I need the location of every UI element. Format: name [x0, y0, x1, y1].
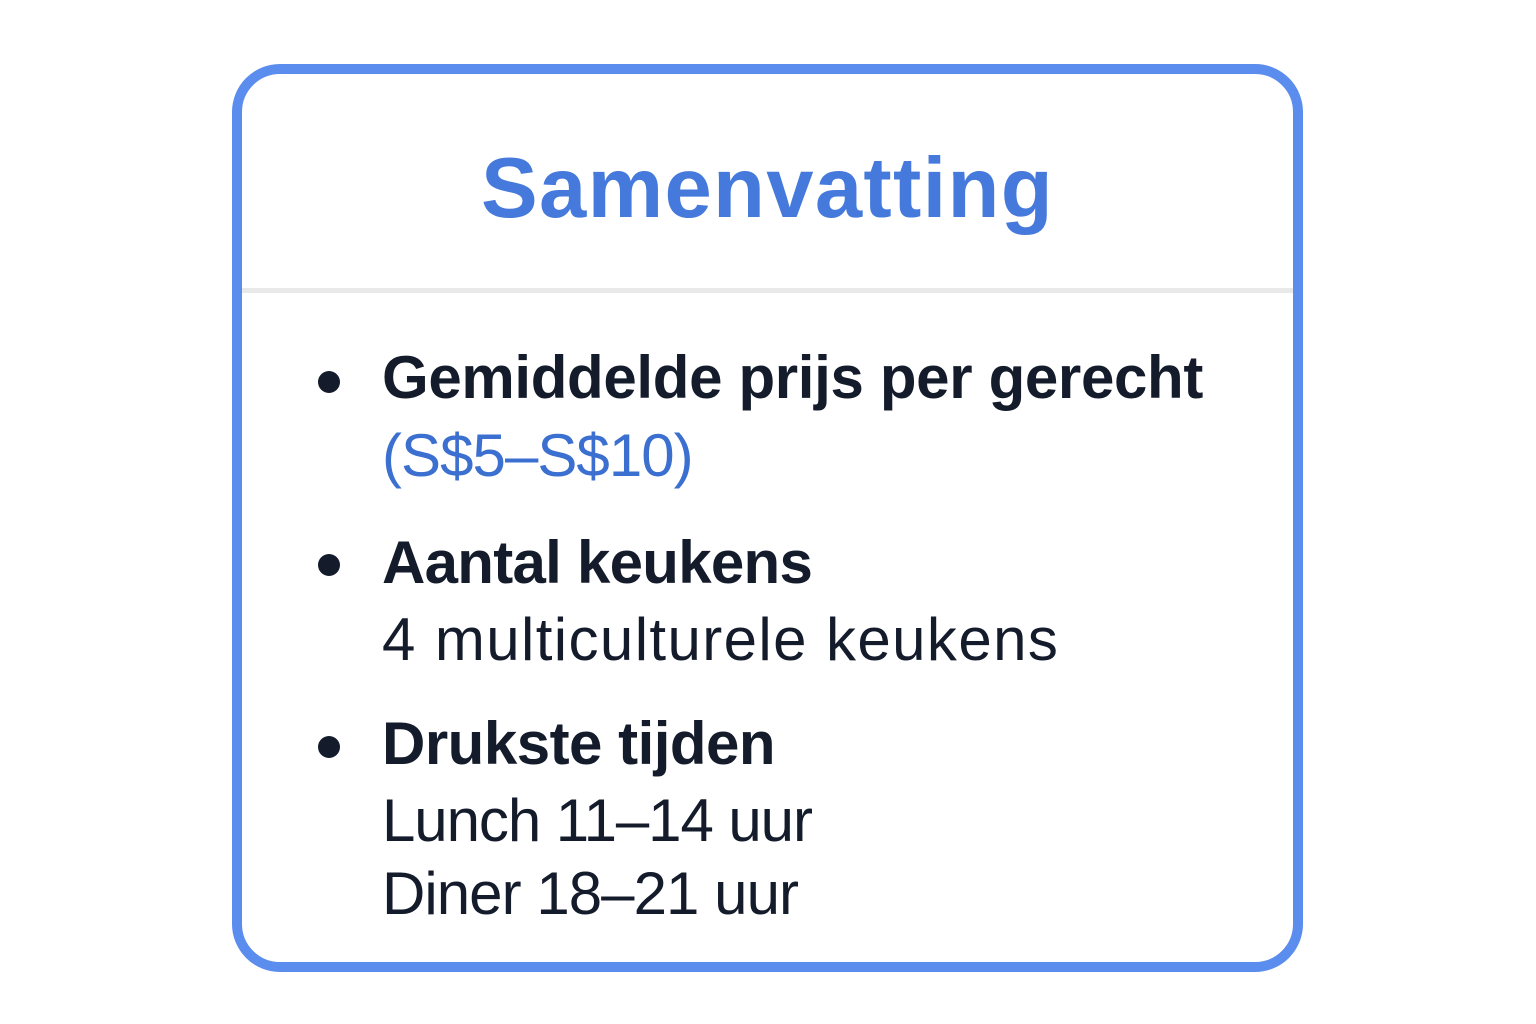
- text: cuisines value: 4 multiculturele keukens: [382, 606, 1059, 673]
- text: busiest times label: Drukste tijden: [382, 710, 775, 777]
- text: cuisines label: Aantal keukens: [382, 529, 812, 596]
- text: price range: (S$5–S$10): [382, 422, 693, 489]
- bullet: busiest times: [318, 736, 340, 758]
- bullet: price: [318, 371, 340, 393]
- heading: Samenvatting: Samenvatting: [481, 141, 1054, 236]
- text: dinner hours: Diner 18–21 uur: [382, 860, 798, 927]
- bullet: cuisines: [318, 554, 340, 576]
- divider under heading: [242, 288, 1293, 293]
- text: average price label: Gemiddelde prijs per gerecht: [382, 344, 1203, 411]
- text: lunch hours: Lunch 11–14 uur: [382, 787, 812, 854]
- panel: summary card: [232, 64, 1303, 972]
